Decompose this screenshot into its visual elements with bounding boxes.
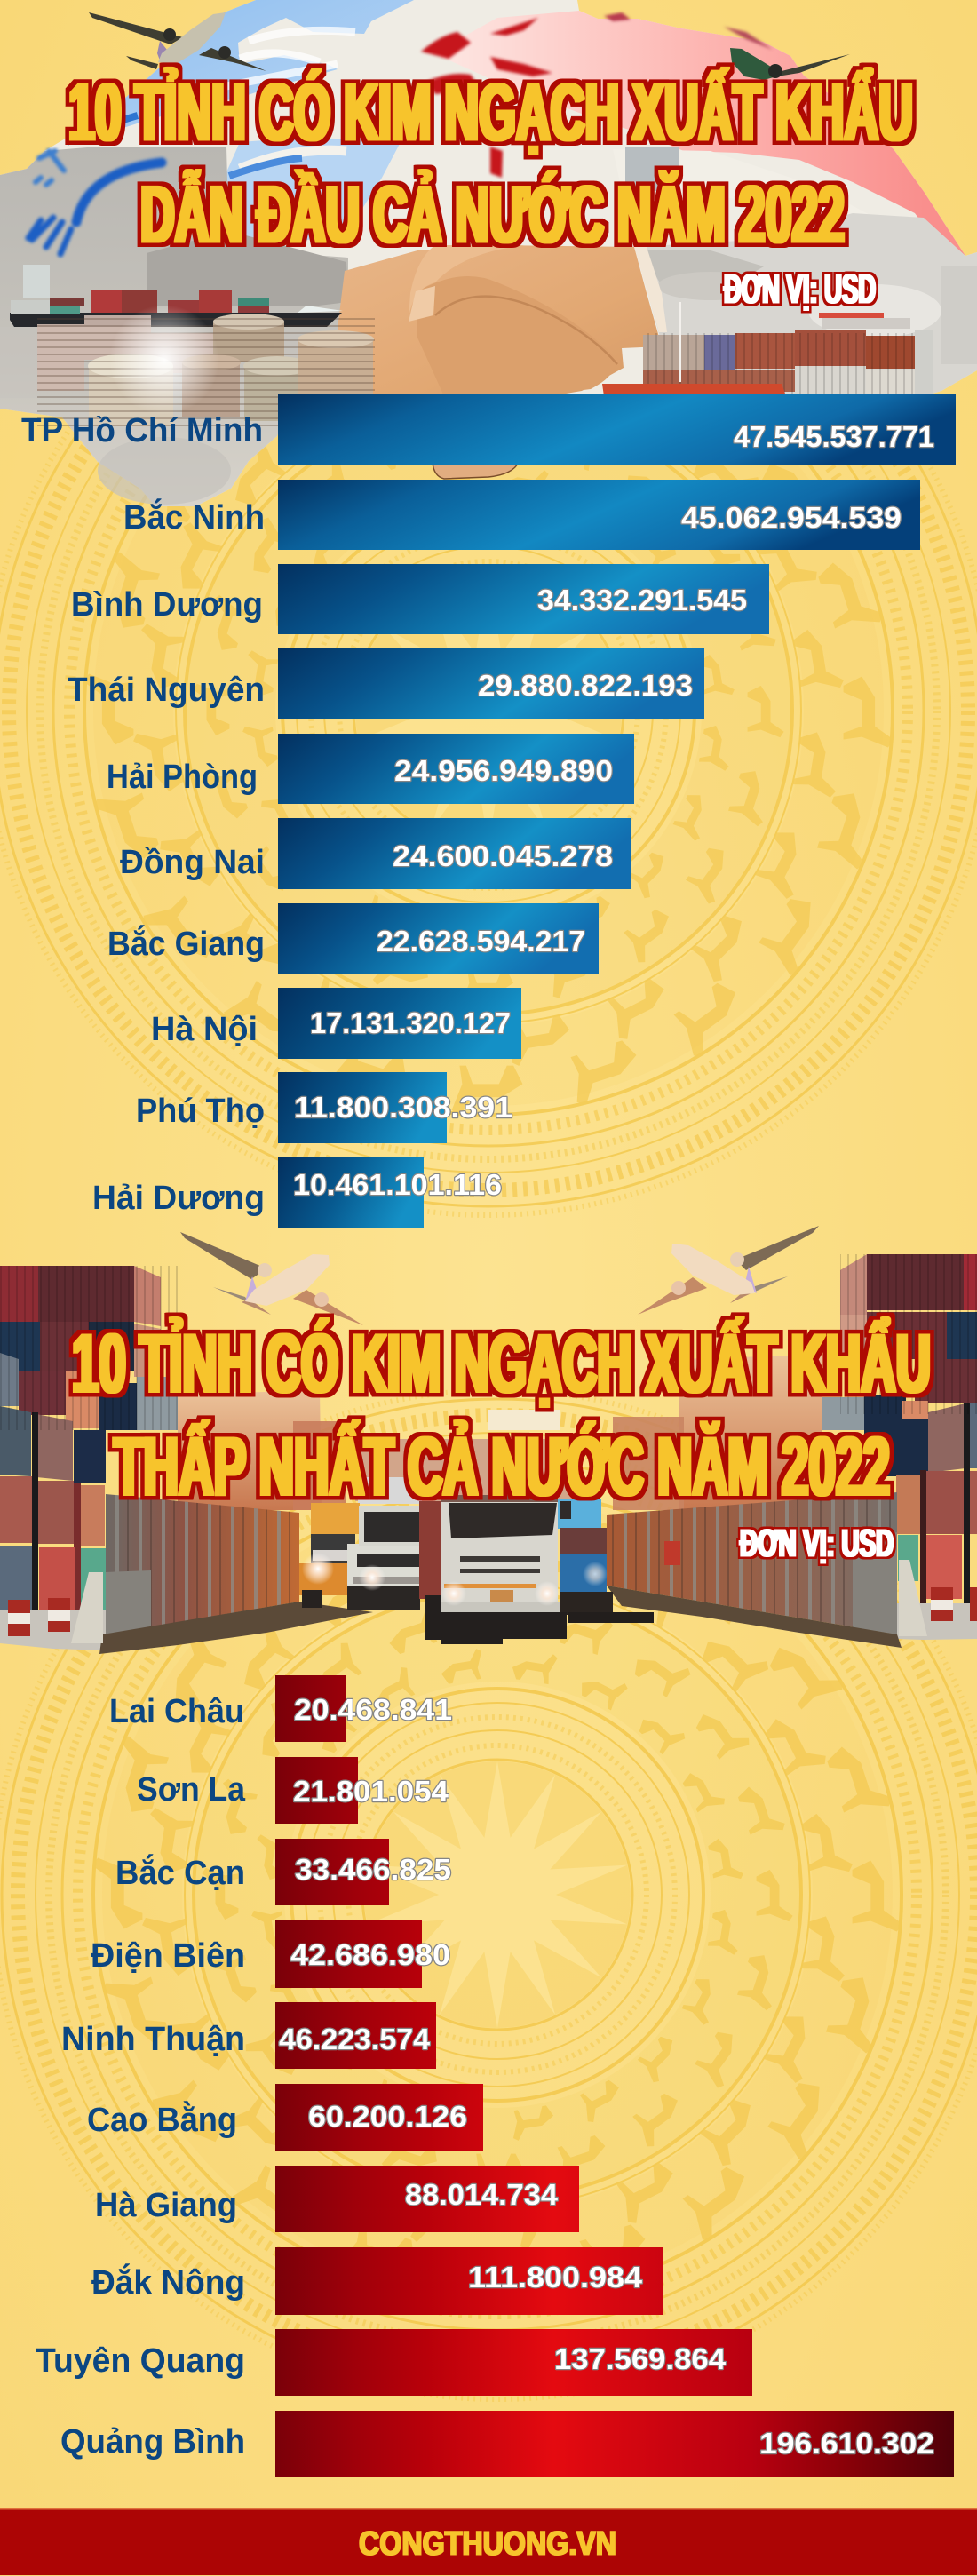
- bar: Điện Biên: Điện Biên: [91, 1937, 245, 1975]
- bar: Hải Phòng: Hải Phòng: [107, 759, 258, 796]
- container ship right: [602, 302, 933, 396]
- pink map: [433, 11, 965, 256]
- blue map upper: [67, 0, 414, 142]
- bar: Bắc Ninh: Bắc Ninh: [123, 497, 265, 537]
- bar: Phú Thọ: [136, 1072, 512, 1143]
- bar: Ninh Thuận: 46.223.574: [279, 2023, 431, 2055]
- bar: Bắc Ninh: [123, 480, 920, 550]
- bar: Bình Dương: Bình Dương: [71, 586, 263, 624]
- hand remnant under bar: [433, 462, 519, 479]
- bar: TP Hồ Chí Minh: TP Hồ Chí Minh: [21, 412, 263, 449]
- bar: Lai Châu: 20.468.841: [294, 1693, 452, 1726]
- bar: Bình Dương: 34.332.291.545: [537, 584, 747, 616]
- bar: Đồng Nai: [120, 818, 631, 889]
- red continents: [421, 12, 773, 178]
- bar: Đắk Nông: [91, 2247, 663, 2315]
- bar: Hải Dương: [92, 1157, 502, 1228]
- blue coast dark strokes: [28, 151, 162, 254]
- bar: Tuyên Quang: 137.569.864: [554, 2342, 727, 2375]
- bar: TP Hồ Chí Minh: 47.545.537.771: [734, 420, 934, 453]
- bar: Cao Bằng: 60.200.126: [308, 2100, 467, 2133]
- bar: Hà Nội: [151, 988, 521, 1059]
- icon: plane bottom right: [638, 1226, 819, 1315]
- bar: Hà Nội: 17.131.320.127: [310, 1006, 511, 1039]
- truck: white left: [347, 1506, 421, 1610]
- panel: bottom photo collage: [0, 1254, 977, 1654]
- bar: Sơn La: [137, 1757, 449, 1824]
- truck: orange: [299, 1503, 360, 1608]
- bar: Ninh Thuận: Ninh Thuận: [61, 2021, 245, 2058]
- bar: Thái Nguyên: Thái Nguyên: [68, 672, 265, 709]
- bar: Điện Biên: 42.686.980: [290, 1938, 450, 1971]
- bar: Đồng Nai: Đồng Nai: [120, 844, 265, 881]
- left fence: [71, 1494, 373, 1654]
- left containers: [0, 1266, 178, 1650]
- bar: Bắc Ninh: 45.062.954.539: [681, 501, 902, 534]
- bar: Đắk Nông: 111.800.984: [468, 2261, 643, 2294]
- bar: Phú Thọ: 11.800.308.391: [294, 1091, 512, 1124]
- grey lower-left texture: [0, 147, 348, 506]
- icon: plane bottom left: [180, 1232, 363, 1325]
- city block: [625, 147, 679, 191]
- bar: Cao Bằng: Cao Bằng: [87, 2100, 237, 2139]
- icon: plane top left: [89, 12, 266, 71]
- title: highest: [68, 68, 913, 259]
- distant orange buildings: [178, 1355, 822, 1510]
- panel: top photo collage: [0, 0, 977, 506]
- bar: Sơn La: 21.801.054: [293, 1775, 449, 1808]
- bar: Sơn La: Sơn La: [137, 1771, 246, 1809]
- bar: Hà Nội: Hà Nội: [151, 1011, 258, 1048]
- bar: Lai Châu: [109, 1675, 452, 1742]
- footer band: CONGTHUONG.VN: [359, 2525, 616, 2563]
- bar: Thái Nguyên: [68, 648, 704, 719]
- bar: Hà Giang: [95, 2166, 579, 2232]
- bar: TP Hồ Chí Minh: [21, 394, 956, 465]
- right grey with coins: [635, 213, 977, 396]
- bar: Đắk Nông: Đắk Nông: [91, 2262, 245, 2302]
- bar: Hà Giang: Hà Giang: [95, 2187, 237, 2224]
- container ship left: [10, 265, 343, 327]
- truck: blue: [557, 1499, 654, 1623]
- bar: Hải Dương: 10.461.101.116: [293, 1168, 502, 1201]
- bar: Bắc Cạn: 33.466.825: [295, 1853, 451, 1886]
- icon: plane top right: [730, 48, 850, 80]
- bar: Ninh Thuận: [61, 2002, 436, 2069]
- bar: Bắc Giang: 22.628.594.217: [377, 925, 585, 958]
- bar: Hải Dương: Hải Dương: [92, 1180, 265, 1217]
- bar: Bắc Giang: Bắc Giang: [107, 924, 265, 963]
- title: lowest: [72, 1316, 931, 1513]
- drum pattern: upper: [0, 206, 977, 1215]
- bar: Hải Phòng: 24.956.949.890: [394, 754, 613, 787]
- bar chart: lowest export provinces: [36, 1675, 954, 2477]
- blue map lower: [222, 138, 401, 258]
- bar: Quảng Bình: 196.610.302: [759, 2427, 934, 2460]
- footer band: [0, 2508, 977, 2575]
- bar: Bắc Cạn: Bắc Cạn: [115, 1853, 245, 1892]
- right containers: [822, 1254, 977, 1640]
- bar: Cao Bằng: [87, 2084, 483, 2151]
- bar: Bắc Giang: [107, 903, 599, 974]
- map base: [0, 0, 977, 506]
- bar: Hà Giang: 88.014.734: [405, 2178, 559, 2211]
- hand shake: [337, 245, 667, 396]
- bar: Đồng Nai: 24.600.045.278: [393, 839, 613, 872]
- bar: Điện Biên: [91, 1920, 450, 1988]
- bar: Tuyên Quang: [36, 2329, 752, 2396]
- bar: Bình Dương: [71, 564, 769, 634]
- bar: Quảng Bình: Quảng Bình: [60, 2423, 245, 2461]
- right fence: [607, 1492, 927, 1648]
- unit label: highest: ĐƠN VỊ: USD: [724, 266, 876, 312]
- bar chart: highest export provinces: [21, 394, 956, 1228]
- bar: Lai Châu: Lai Châu: [109, 1693, 244, 1730]
- bar: Phú Thọ: Phú Thọ: [136, 1093, 265, 1130]
- bar: Thái Nguyên: 29.880.822.193: [478, 669, 693, 702]
- bar: Tuyên Quang: Tuyên Quang: [36, 2342, 245, 2380]
- bar: Bắc Cạn: [115, 1839, 451, 1905]
- buildings left: [147, 231, 348, 306]
- bar: Quảng Bình: [60, 2411, 954, 2477]
- bar: Hải Phòng: [107, 734, 634, 804]
- drum pattern: lower: [0, 1390, 977, 2399]
- truck: white main: [419, 1495, 571, 1644]
- coin stacks: [0, 305, 375, 505]
- unit label: lowest: ĐƠN VỊ: USD: [740, 1522, 894, 1565]
